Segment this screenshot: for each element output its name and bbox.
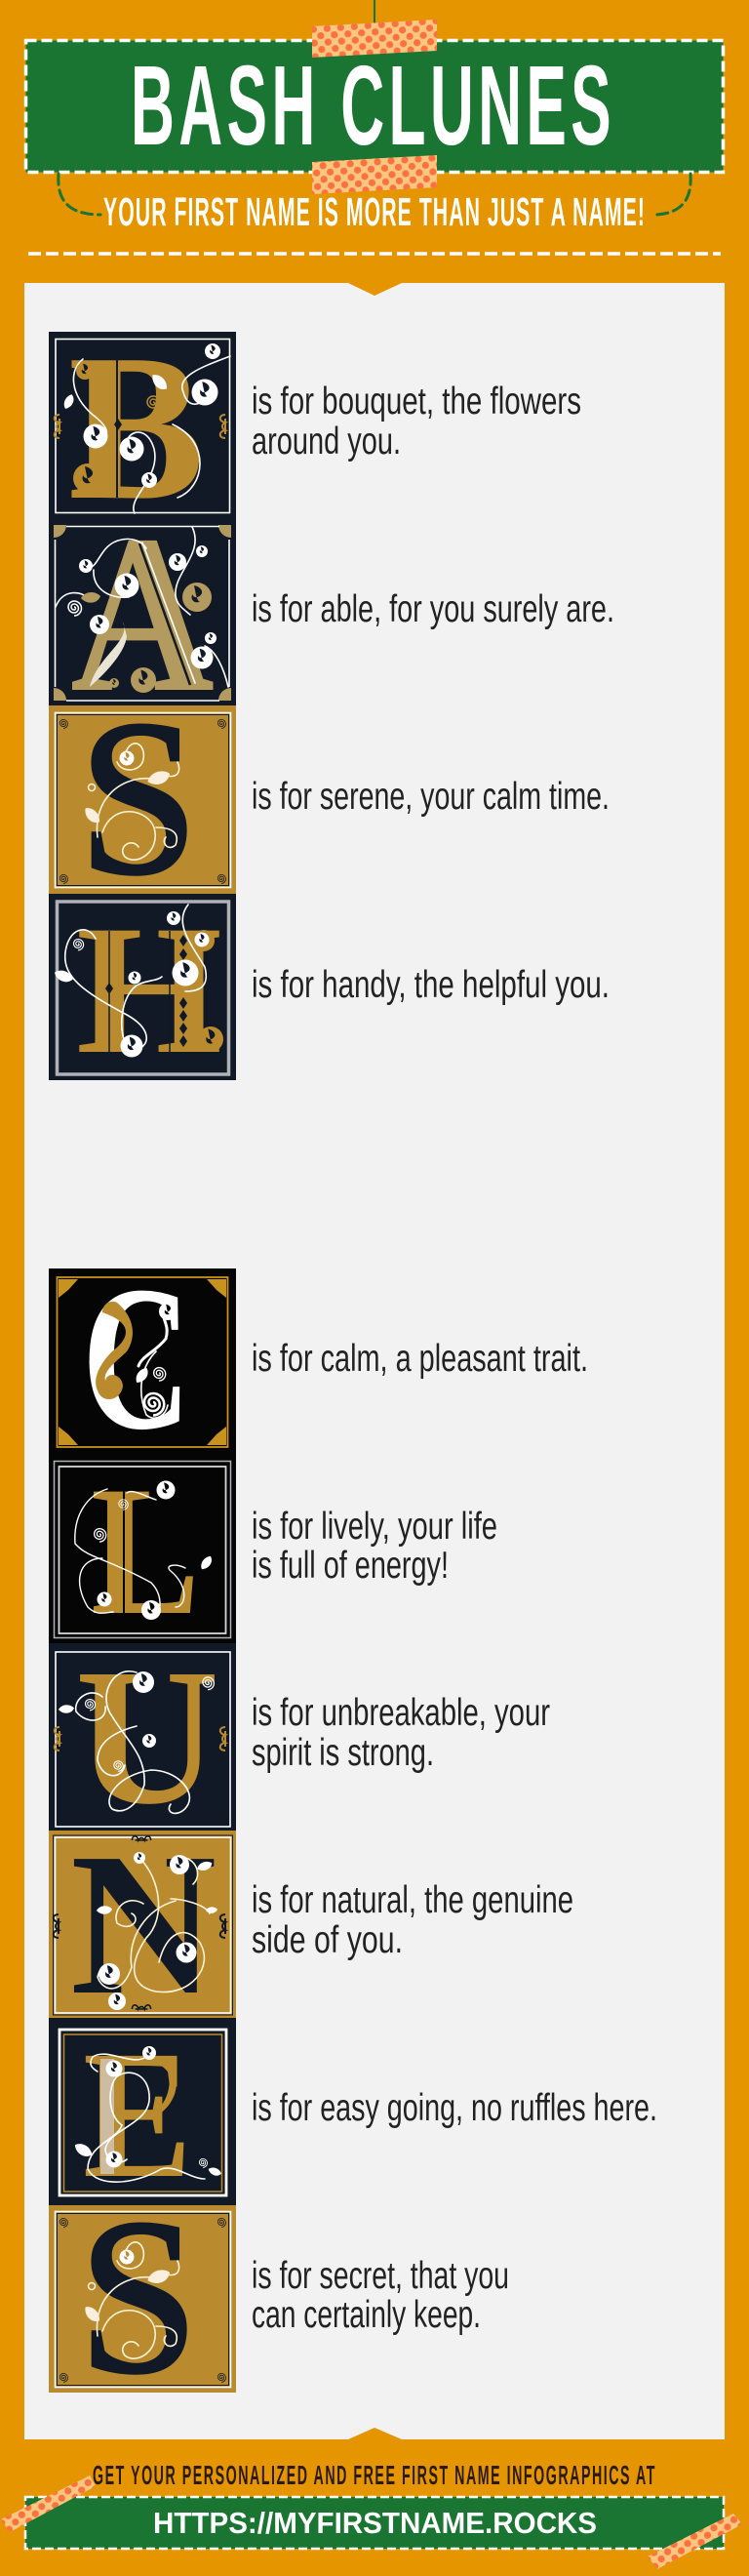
- tape: bottom: [312, 155, 437, 194]
- text U: is for unbreakable, your: [252, 1692, 550, 1734]
- tile S: [49, 675, 236, 921]
- letter B: B: [68, 310, 205, 543]
- text H: is for handy, the helpful you.: [252, 964, 610, 1006]
- text N: [252, 1879, 573, 1961]
- tile U: [49, 1630, 236, 1845]
- tile H: [49, 888, 236, 1093]
- tile N: [49, 1812, 236, 2037]
- letter S: S: [78, 675, 199, 921]
- connector left: [59, 174, 100, 215]
- text N: side of you.: [252, 1919, 403, 1961]
- row: N: [49, 1812, 573, 2037]
- letter N: N: [70, 1812, 217, 2037]
- row: L: [49, 1449, 497, 1654]
- title banner: [25, 41, 724, 172]
- text L: is for lively, your life: [252, 1506, 497, 1548]
- letter A: A: [70, 489, 215, 740]
- row: H: [49, 888, 610, 1093]
- text B: is for bouquet, the flowers: [252, 381, 581, 423]
- text L: is full of energy!: [252, 1545, 449, 1587]
- divider: [28, 252, 721, 256]
- tile A: [49, 489, 236, 740]
- content panel: [24, 283, 725, 2439]
- tile C: [49, 1243, 236, 1472]
- text B: around you.: [252, 421, 401, 463]
- text S: [252, 2255, 509, 2336]
- letter E: E: [83, 2012, 192, 2216]
- letter H: H: [76, 888, 222, 1093]
- letter C: C: [82, 1243, 191, 1472]
- letter L: L: [91, 1449, 200, 1654]
- tile L: [49, 1449, 236, 1654]
- text U: [252, 1692, 550, 1774]
- footer url: HTTPS://MYFIRSTNAME.ROCKS: [153, 2506, 597, 2540]
- row: C: [49, 1243, 588, 1472]
- text A: is for able, for you surely are.: [252, 588, 614, 630]
- text C: is for calm, a pleasant trait.: [252, 1338, 588, 1380]
- row: B: [49, 310, 581, 543]
- text U: spirit is strong.: [252, 1732, 434, 1774]
- tile S: [49, 2174, 236, 2420]
- row: S: [49, 2174, 509, 2420]
- connector right: [652, 174, 690, 215]
- text N: is for natural, the genuine: [252, 1879, 573, 1921]
- tile B: [49, 310, 236, 543]
- text S: is for serene, your calm time.: [252, 776, 610, 818]
- text S: is for secret, that you: [252, 2255, 509, 2297]
- letter U: U: [75, 1630, 219, 1845]
- row: S: [49, 675, 610, 921]
- tape: footer left: [1, 2475, 96, 2532]
- tape: footer right: [648, 2514, 742, 2569]
- row: E: [49, 2012, 657, 2216]
- tile E: [49, 2012, 236, 2216]
- tape: top: [312, 20, 437, 58]
- text L: [252, 1506, 497, 1587]
- row: A: [49, 489, 614, 740]
- letter S: S: [78, 2174, 199, 2420]
- hanging string: [374, 0, 375, 23]
- text B: [252, 381, 581, 463]
- row: U: [49, 1630, 550, 1845]
- text S: can certainly keep.: [252, 2294, 481, 2336]
- footer banner: [25, 2497, 724, 2549]
